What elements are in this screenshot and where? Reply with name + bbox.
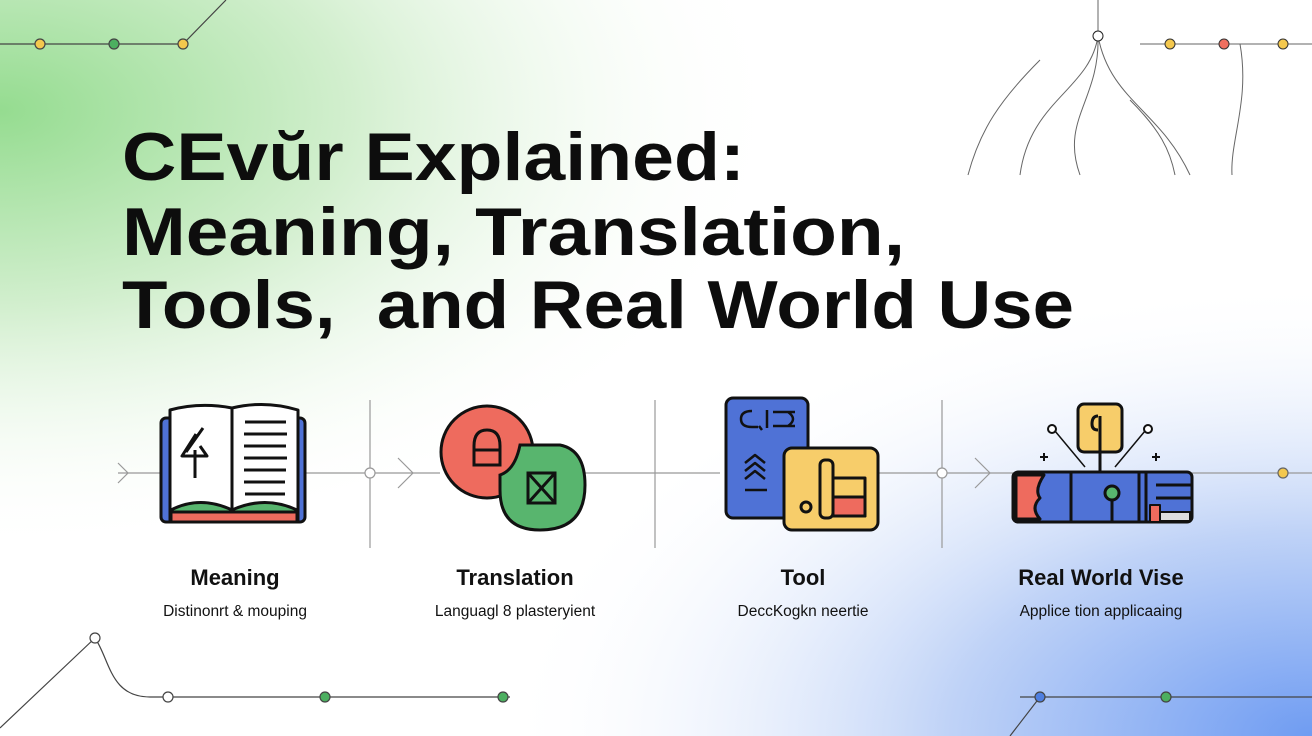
- label: translation: Translation: [456, 565, 574, 590]
- label: translation: [435, 565, 596, 620]
- decor: bottom-right network: [1010, 692, 1312, 736]
- labels: [163, 565, 1184, 620]
- icon: book: [161, 404, 305, 522]
- label: tool: DeccKogkn neertie: [738, 603, 868, 620]
- icon: real world device: [1013, 404, 1192, 522]
- icon: tool cards: [726, 398, 878, 530]
- label: meaning: Meaning: [190, 565, 280, 590]
- title: [122, 119, 1074, 343]
- label: translation: Languagl 8 plasteryient: [435, 603, 596, 620]
- title: Meaning, Translation,: [122, 194, 905, 270]
- label: real world use: [1018, 565, 1184, 620]
- label: tool: [738, 565, 868, 620]
- icon: translation bubbles: [441, 406, 585, 530]
- label: tool: Tool: [781, 565, 825, 590]
- label: meaning: Distinonrt & mouping: [163, 603, 307, 620]
- title: Tools, and Real World Use: [122, 267, 1074, 343]
- label: meaning: [163, 565, 307, 620]
- decor: bottom-left network: [0, 633, 510, 728]
- title: CEvŭr Explained:: [122, 119, 745, 195]
- connector lines: [118, 400, 1312, 548]
- decor: top-left network: [0, 0, 226, 49]
- label: real world use: Applice tion applicaaing: [1020, 603, 1182, 620]
- label: real world use: Real World Vise: [1018, 565, 1184, 590]
- decor: top-right network: [968, 0, 1312, 175]
